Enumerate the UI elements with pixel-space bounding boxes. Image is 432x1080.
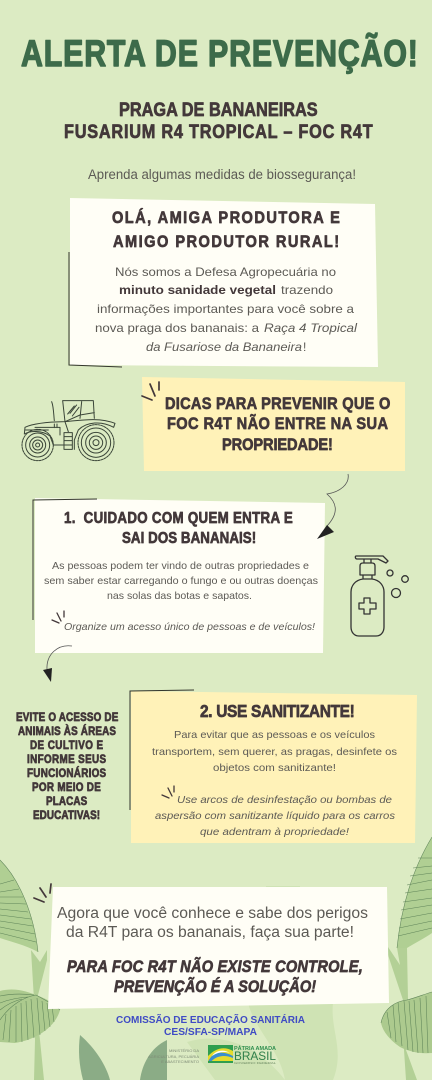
greeting body text: !: [303, 340, 306, 354]
icon: sparks: [52, 611, 64, 623]
panel: tips heading: [142, 377, 405, 471]
subtitle: FUSARIUM R4 TROPICAL – FOC R4T: [64, 121, 373, 142]
right plant: [381, 837, 432, 1080]
arrow: step 1 to left note: [43, 646, 72, 682]
step 1 heading: [64, 510, 293, 547]
greeting body text: minuto sanidade vegetal: [119, 283, 276, 297]
ministry logo text: [148, 1048, 199, 1064]
closing slogan: [67, 955, 363, 996]
step 2 tip: aspersão com sanitizante líquido para os carros: [155, 810, 396, 822]
credits: CES/SFA-SP/MAPA: [164, 1027, 257, 1038]
closing slogan: PARA FOC R4T NÃO EXISTE CONTROLE,: [67, 955, 363, 976]
dark bottom leaves: [79, 1035, 167, 1080]
left plant: [0, 860, 60, 1080]
icon: sparks: [34, 884, 51, 902]
greeting body text: Raça 4 Tropical: [264, 321, 357, 335]
closing text: Agora que você conhece e sabe dos perigos: [57, 905, 368, 922]
greeting body text: Nós somos a Defesa Agropecuária no: [115, 265, 336, 279]
greeting body text: da Fusariose da Bananeira: [146, 340, 302, 354]
greeting heading: OLÁ, AMIGA PRODUTORA E: [112, 207, 340, 227]
title: ALERTA DE PREVENÇÃO!: [21, 33, 418, 75]
step 1 body text: As pessoas podem ter vindo de outras propriedades e: [52, 560, 309, 572]
step 2 body text: objetos com sanitizante!: [213, 762, 336, 774]
panel: greeting: [69, 198, 378, 367]
greeting heading: [112, 207, 340, 251]
credits: [116, 1013, 305, 1038]
greeting body text: trazendo: [281, 283, 333, 297]
Brazil government logo: BRASIL: [234, 1051, 277, 1063]
greeting body text: nova praga dos bananais: a: [95, 321, 259, 335]
icon: sanitizer bottle: [351, 556, 408, 636]
closing slogan: PREVENÇÃO É A SOLUÇÃO!: [114, 975, 316, 996]
Brazil government logo: PÁTRIA AMADA: [234, 1045, 276, 1052]
tips heading text: FOC R4T NÃO ENTRE NA SUA: [167, 412, 389, 433]
left note: POR MEIO DE: [32, 781, 101, 794]
panel: closing message: [34, 884, 389, 1009]
credits: COMISSÃO DE EDUCAÇÃO SANITÁRIA: [116, 1013, 305, 1026]
ministry logo text: MINISTÉRIO DA: [169, 1048, 199, 1053]
tips heading text: [165, 395, 390, 454]
step 1 body text: nas solas das botas e sapatos.: [107, 590, 252, 602]
greeting body text: [95, 265, 357, 354]
step 2 body text: transportem, sem querer, as pragas, desinfete os: [152, 746, 397, 758]
pale background leaves: [187, 886, 338, 1080]
step 1 body text: sem saber estar carregando o fungo e ou outras doenças: [44, 575, 318, 587]
closing text: da R4T para os bananais, faça sua parte!: [66, 924, 354, 941]
step 2 body text: [152, 729, 397, 774]
subtitle: [64, 99, 373, 142]
arrow: tips to step 1: [317, 474, 348, 539]
greeting body text: informações importantes para você sobre a: [97, 302, 354, 316]
left note: EVITE O ACESSO DE: [16, 711, 118, 724]
icon: sparks: [142, 382, 159, 400]
tips heading text: PROPRIEDADE!: [222, 436, 333, 454]
step 2 tip: que adentram à propriedade!: [200, 826, 349, 838]
step 1 heading: 1. CUIDADO COM QUEM ENTRA E: [64, 510, 293, 527]
ministry logo text: E ABASTECIMENTO: [161, 1059, 199, 1064]
step 2 tip: [155, 794, 396, 838]
step 2 body text: Para evitar que as pessoas e os veículos: [174, 729, 375, 741]
icon: tractor: [22, 401, 115, 461]
icon: sparks: [162, 786, 174, 798]
greeting heading: AMIGO PRODUTOR RURAL!: [113, 233, 339, 251]
left note: ANIMAIS ÀS ÁREAS: [18, 724, 116, 738]
closing text: [57, 905, 368, 941]
step 1 body text: [44, 560, 318, 602]
Brazil government logo: [208, 1045, 277, 1065]
left note: PLACAS: [46, 795, 87, 808]
ministry logo text: AGRICULTURA, PECUÁRIA: [148, 1054, 199, 1059]
panel: step 2: [130, 690, 417, 843]
left note: INFORME SEUS: [27, 753, 106, 766]
step 2 heading: 2. USE SANITIZANTE!: [200, 701, 355, 721]
panel: step 1: [33, 498, 325, 653]
subtitle: PRAGA DE BANANEIRAS: [119, 99, 318, 120]
left note: EDUCATIVAS!: [33, 809, 100, 822]
step 1 heading: SAI DOS BANANAIS!: [122, 530, 256, 547]
left note: [16, 711, 118, 822]
step 2 tip: Use arcos de desinfestação ou bombas de: [177, 794, 392, 806]
intro line: Aprenda algumas medidas de biossegurança!: [88, 167, 356, 182]
left note: FUNCIONÁRIOS: [27, 766, 106, 780]
tips heading text: DICAS PARA PREVENIR QUE O: [165, 395, 390, 413]
step 1 tip: Organize um acesso único de pessoas e de veículos!: [64, 621, 315, 633]
Brazil government logo: GOVERNO FEDERAL: [234, 1061, 277, 1065]
background foliage: [0, 837, 432, 1080]
left note: DE CULTIVO E: [30, 739, 103, 752]
